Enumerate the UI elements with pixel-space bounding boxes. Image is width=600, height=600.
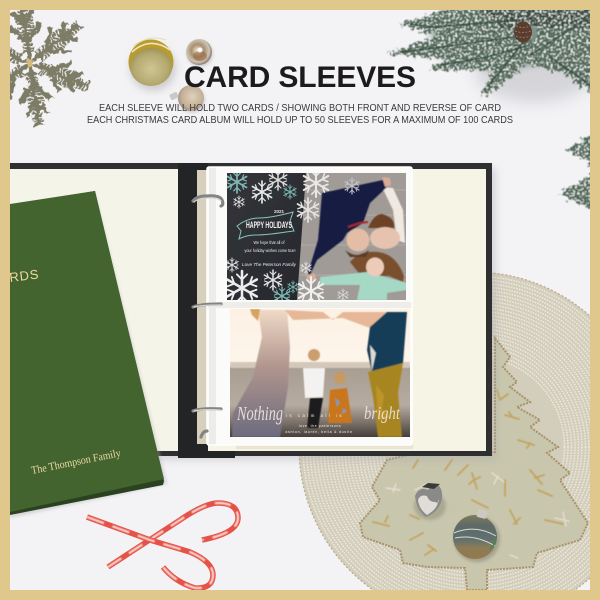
raised arms	[285, 310, 387, 328]
green album	[9, 191, 167, 518]
album family name: The Thompson Family	[30, 447, 122, 477]
sleeve highlight edge	[207, 167, 412, 445]
binder rings	[193, 196, 223, 437]
chalkboard panel	[227, 173, 306, 300]
pine cone	[514, 22, 532, 42]
greeting line 2: your holiday wishes come true!	[244, 248, 296, 253]
children in photo	[306, 177, 407, 300]
signature: Love The Peterson Family	[242, 262, 297, 268]
candy cane two	[87, 517, 213, 588]
card family names: ashton, lauren, bella & dustin	[285, 430, 353, 434]
ring mechanism plate	[197, 170, 206, 444]
pearl ornament	[169, 85, 205, 113]
beaded tree on placemat	[360, 338, 588, 590]
banner heading: HAPPY HOLIDAYS	[246, 220, 292, 230]
card: happy holidays photo	[226, 169, 407, 305]
small silver ornament	[186, 39, 213, 67]
beaded placemat	[299, 272, 600, 600]
striped ornament	[453, 509, 500, 562]
script headline left: Nothing	[236, 403, 283, 425]
father	[367, 312, 407, 372]
card: nothing is calmer photo	[230, 309, 410, 437]
overlapping photo snowflakes	[298, 169, 359, 305]
album title fragment: RDS	[9, 266, 40, 285]
binder shadow	[158, 166, 498, 462]
spaced headline middle: is calm all is	[286, 413, 344, 418]
pine branches	[386, 10, 590, 210]
year text: 2021	[274, 209, 285, 214]
gold ornament	[128, 38, 176, 91]
description line 1: EACH SLEEVE WILL HOLD TWO CARDS / SHOWING BOTH FRONT AND REVERSE OF CARD	[99, 103, 501, 114]
chalk snowflakes	[226, 170, 298, 305]
description line 2: EACH CHRISTMAS CARD ALBUM WILL HOLD UP TO 50 SLEEVES FOR A MAXIMUM OF 100 CARDS	[87, 115, 513, 126]
candy cane one	[108, 503, 238, 567]
heading: CARD SLEEVES	[184, 61, 416, 94]
card family details: love, the pattersons	[299, 424, 341, 428]
banner	[237, 212, 294, 239]
girl	[334, 372, 346, 384]
script headline right: bright	[364, 403, 401, 423]
binder cover	[10, 163, 492, 458]
greeting line 1: We hope that all of	[254, 240, 285, 245]
boy	[308, 349, 320, 361]
silver heart ornament	[414, 483, 446, 520]
silver snowflake	[10, 10, 91, 128]
card sleeve page	[207, 167, 413, 449]
mother	[232, 310, 290, 437]
